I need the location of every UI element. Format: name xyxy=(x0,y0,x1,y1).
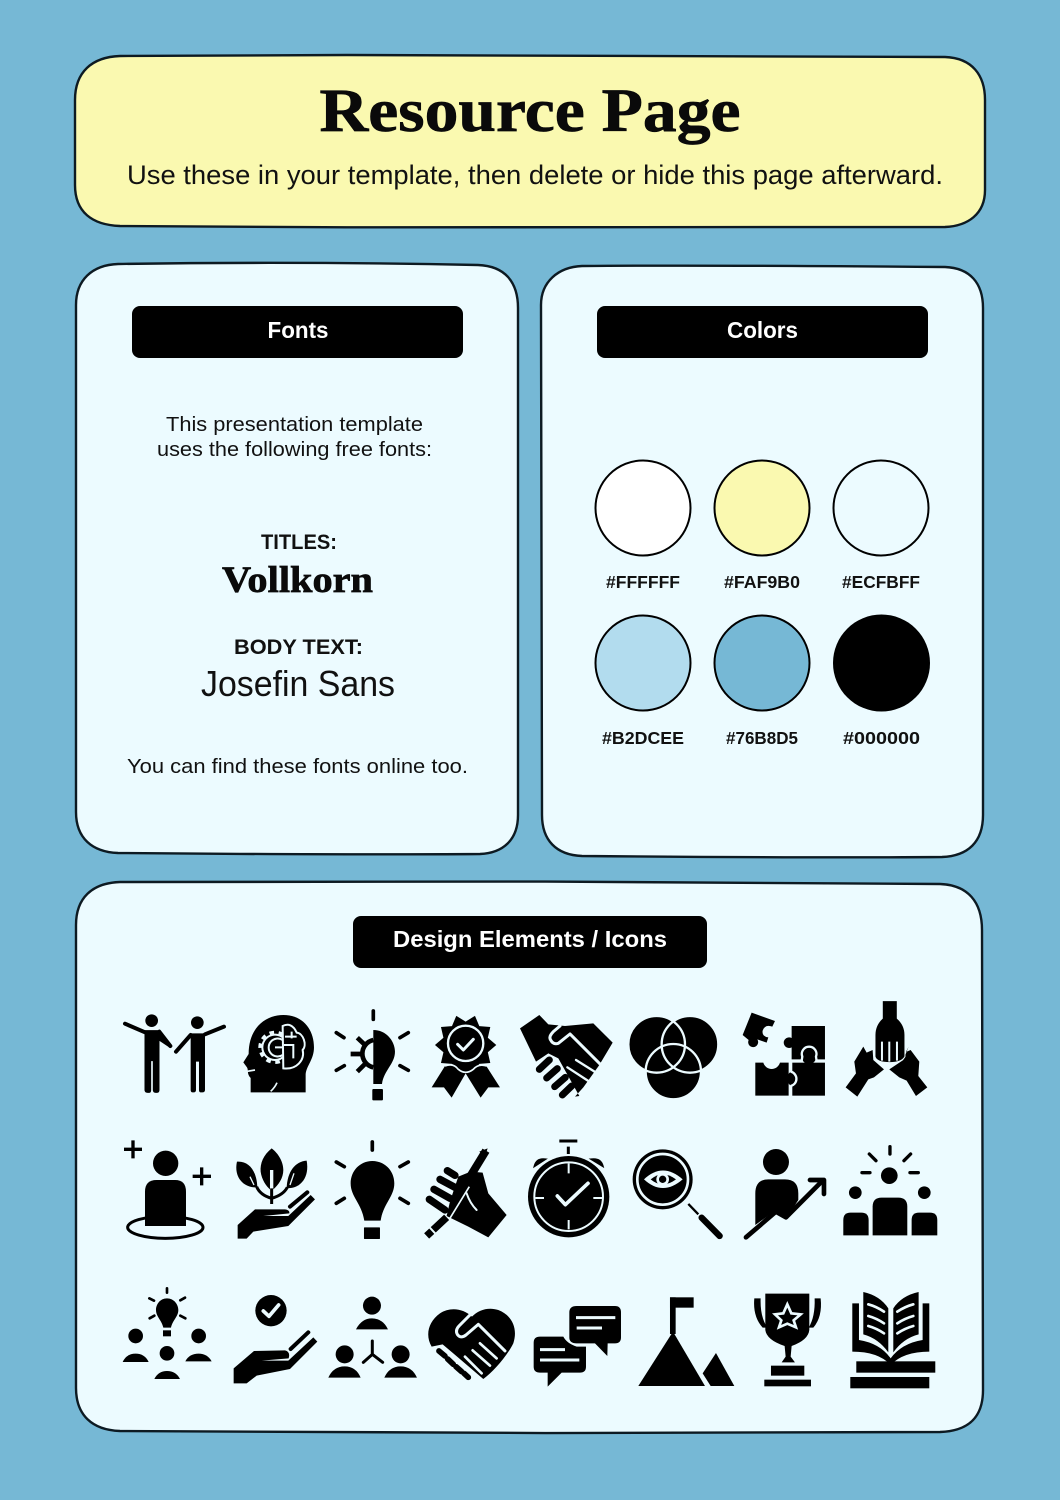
panel: header xyxy=(75,55,985,228)
swatch: blue xyxy=(714,616,810,748)
text block: body font: Josefin Sans xyxy=(201,663,395,704)
icon: team network xyxy=(328,1297,417,1378)
text block: titles font: TITLES: xyxy=(261,531,337,554)
icon row 2 right xyxy=(528,1141,937,1237)
heading bar: fonts xyxy=(132,306,463,358)
icon: stacked hands xyxy=(846,1001,927,1097)
icon: hand with check xyxy=(234,1295,317,1383)
text block: body font xyxy=(201,636,395,704)
swatch: white: #FFFFFF xyxy=(606,572,680,592)
swatch: yellow xyxy=(714,460,810,592)
heading bar: colors xyxy=(597,306,928,358)
icon: trophy with star xyxy=(754,1294,821,1386)
panel: fonts xyxy=(76,263,518,854)
icon: hand with pencil xyxy=(427,1148,507,1237)
heading bar: fonts: Fonts xyxy=(268,317,328,343)
icon: two people xyxy=(125,1014,224,1092)
icon row 1 left xyxy=(125,1011,500,1100)
icon row 1 right xyxy=(520,1001,927,1099)
text block: intro: This presentation template xyxy=(166,413,423,436)
panel: colors xyxy=(541,266,983,857)
icon row 2 left xyxy=(124,1140,507,1239)
icon: stopwatch xyxy=(528,1141,609,1237)
title: Resource Page xyxy=(320,78,740,145)
swatch: pale blue: #ECFBFF xyxy=(842,572,920,592)
text block: footnote: You can find these fonts online too. xyxy=(127,755,468,778)
panel: design elements xyxy=(76,881,983,1433)
text block: body font: BODY TEXT: xyxy=(234,636,363,659)
icon: mountain with flag xyxy=(638,1297,734,1386)
icon row 3 left xyxy=(123,1288,515,1383)
icon: head with gear brain xyxy=(243,1015,314,1092)
icon: puzzle xyxy=(743,1013,825,1096)
swatch: pale blue xyxy=(834,460,928,592)
icon: light bulb xyxy=(336,1142,408,1239)
icon: award rosette xyxy=(432,1016,500,1098)
icon: handshake xyxy=(520,1015,613,1097)
subtitle: Use these in your template, then delete or hide this page afterward. xyxy=(127,160,943,190)
swatch: black xyxy=(833,614,930,748)
icon: open book xyxy=(850,1292,935,1388)
icon: team with idea xyxy=(123,1288,212,1379)
icon: person with plus xyxy=(124,1140,211,1238)
icon: group with sun rays xyxy=(843,1147,937,1235)
swatch: light blue xyxy=(596,616,690,748)
icon: half gear half bulb xyxy=(336,1011,408,1100)
swatch: black: #000000 xyxy=(843,728,920,748)
text block: titles font: Vollkorn xyxy=(222,560,373,601)
heading bar: colors: Colors xyxy=(727,317,798,343)
icon: person with rising arrow xyxy=(746,1149,824,1237)
swatch: light blue: #B2DCEE xyxy=(602,728,684,748)
heading bar: design elements xyxy=(353,916,707,968)
swatch: white xyxy=(596,460,690,592)
text block: titles font xyxy=(222,531,373,601)
swatch: blue: #76B8D5 xyxy=(726,728,798,748)
icon: venn diagram xyxy=(628,1016,718,1099)
text block: intro: uses the following free fonts: xyxy=(157,438,432,461)
icon: plant in hand xyxy=(236,1148,315,1239)
icon row 3 right xyxy=(534,1292,935,1388)
heading bar: design elements: Design Elements / Icons xyxy=(393,926,667,952)
icon: magnifier with eye xyxy=(633,1149,720,1236)
swatch: yellow: #FAF9B0 xyxy=(724,572,800,592)
text block: intro xyxy=(157,413,432,461)
icon: heart handshake xyxy=(428,1309,515,1379)
icon: chat bubbles xyxy=(534,1306,621,1387)
